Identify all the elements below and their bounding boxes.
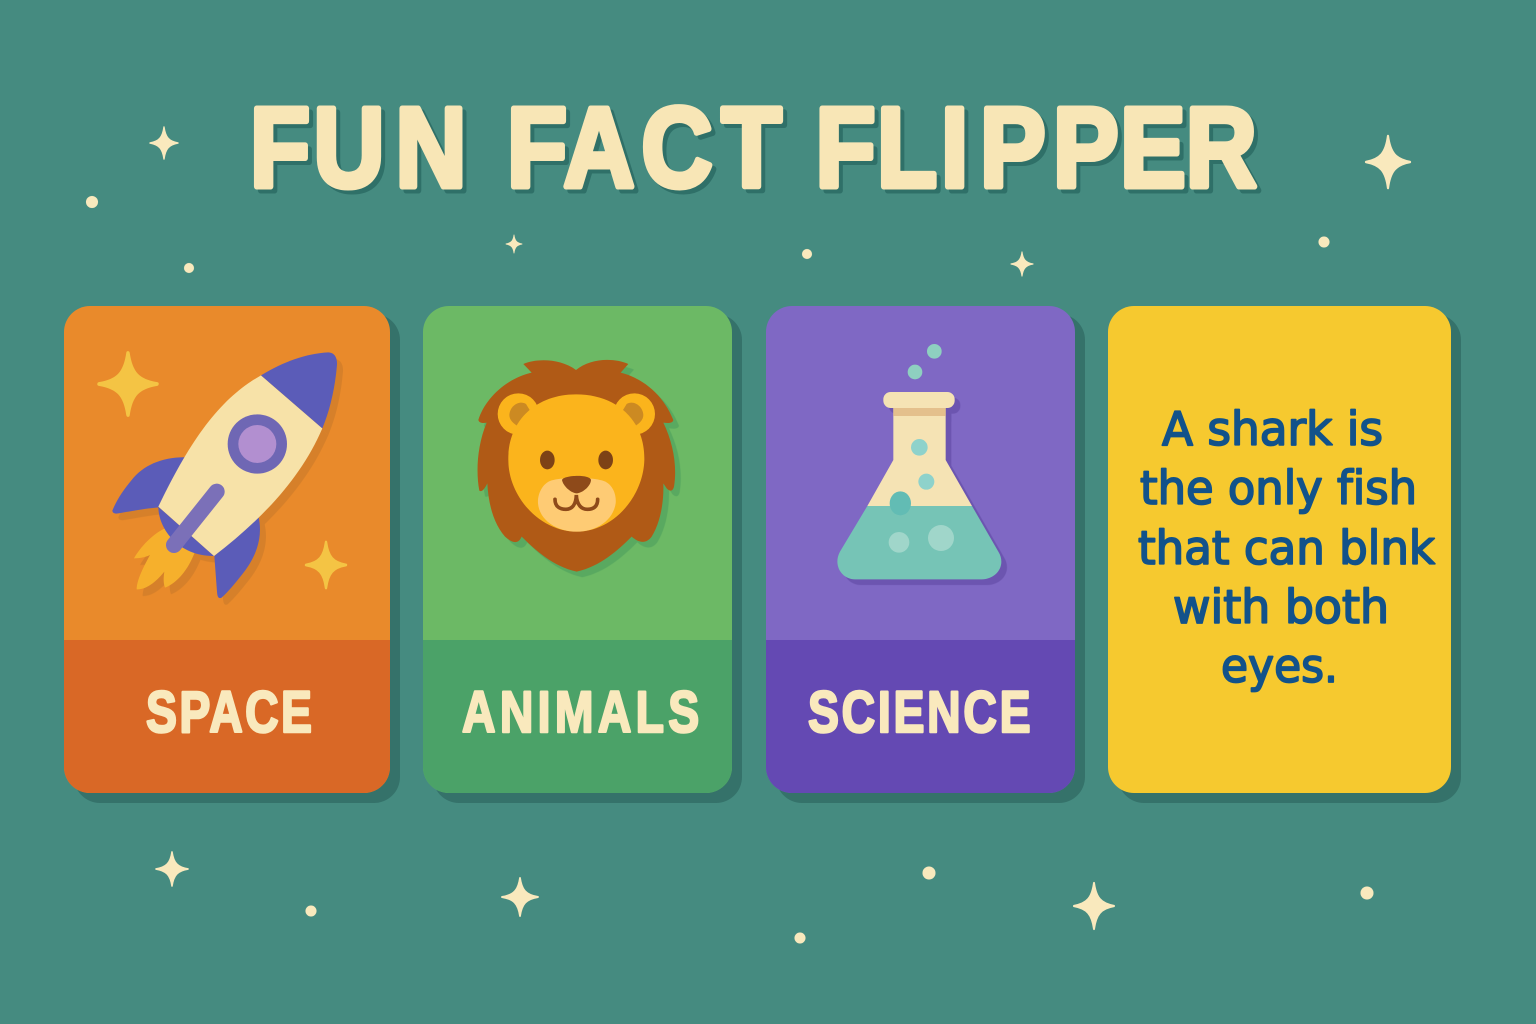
panel: space card — [64, 306, 400, 803]
panel: animals card — [423, 306, 742, 803]
panel: fact card — [1108, 306, 1461, 803]
fact text — [1138, 402, 1435, 693]
icon: flask — [837, 344, 1001, 579]
flask glass — [867, 405, 972, 506]
ears — [498, 393, 539, 435]
icon: small star — [306, 542, 346, 588]
rising bubbles — [908, 344, 942, 379]
panel: science card — [766, 306, 1085, 803]
fact text: A shark is — [1162, 402, 1383, 456]
flame — [134, 527, 195, 589]
flask lip — [883, 392, 955, 408]
face — [508, 394, 644, 532]
mane — [478, 360, 675, 572]
body — [158, 375, 322, 556]
liquid — [837, 506, 1001, 579]
label: science: SCIENCE — [808, 680, 1033, 745]
eyes — [540, 451, 555, 469]
fact text: the only fish — [1140, 461, 1417, 515]
right fin — [214, 516, 260, 598]
neck shading — [893, 407, 946, 416]
title: FUN FACT FLIPPER — [250, 85, 1257, 211]
nose cone — [261, 352, 337, 428]
inner ears — [509, 403, 531, 427]
liquid bubbles — [889, 532, 909, 553]
porthole — [228, 414, 287, 474]
nose — [562, 476, 591, 493]
decorative stars and dots, upper background — [86, 127, 1410, 276]
label: animals: ANIMALS — [462, 680, 704, 745]
centre fin — [174, 492, 217, 545]
fact text: eyes. — [1221, 639, 1338, 693]
decorative stars and dots, lower background — [156, 852, 1374, 944]
muzzle — [538, 478, 616, 532]
glass bubbles — [911, 439, 928, 456]
icon: rocket — [112, 352, 337, 598]
icon: lion — [478, 360, 675, 572]
left fin — [112, 457, 187, 514]
fact text: that can blnk — [1138, 521, 1435, 575]
icon: large star — [99, 353, 157, 415]
nozzle — [158, 507, 214, 556]
label: space: SPACE — [146, 680, 314, 745]
flask body — [837, 392, 1001, 579]
mouth — [555, 495, 598, 509]
fact text: with both — [1173, 580, 1389, 634]
